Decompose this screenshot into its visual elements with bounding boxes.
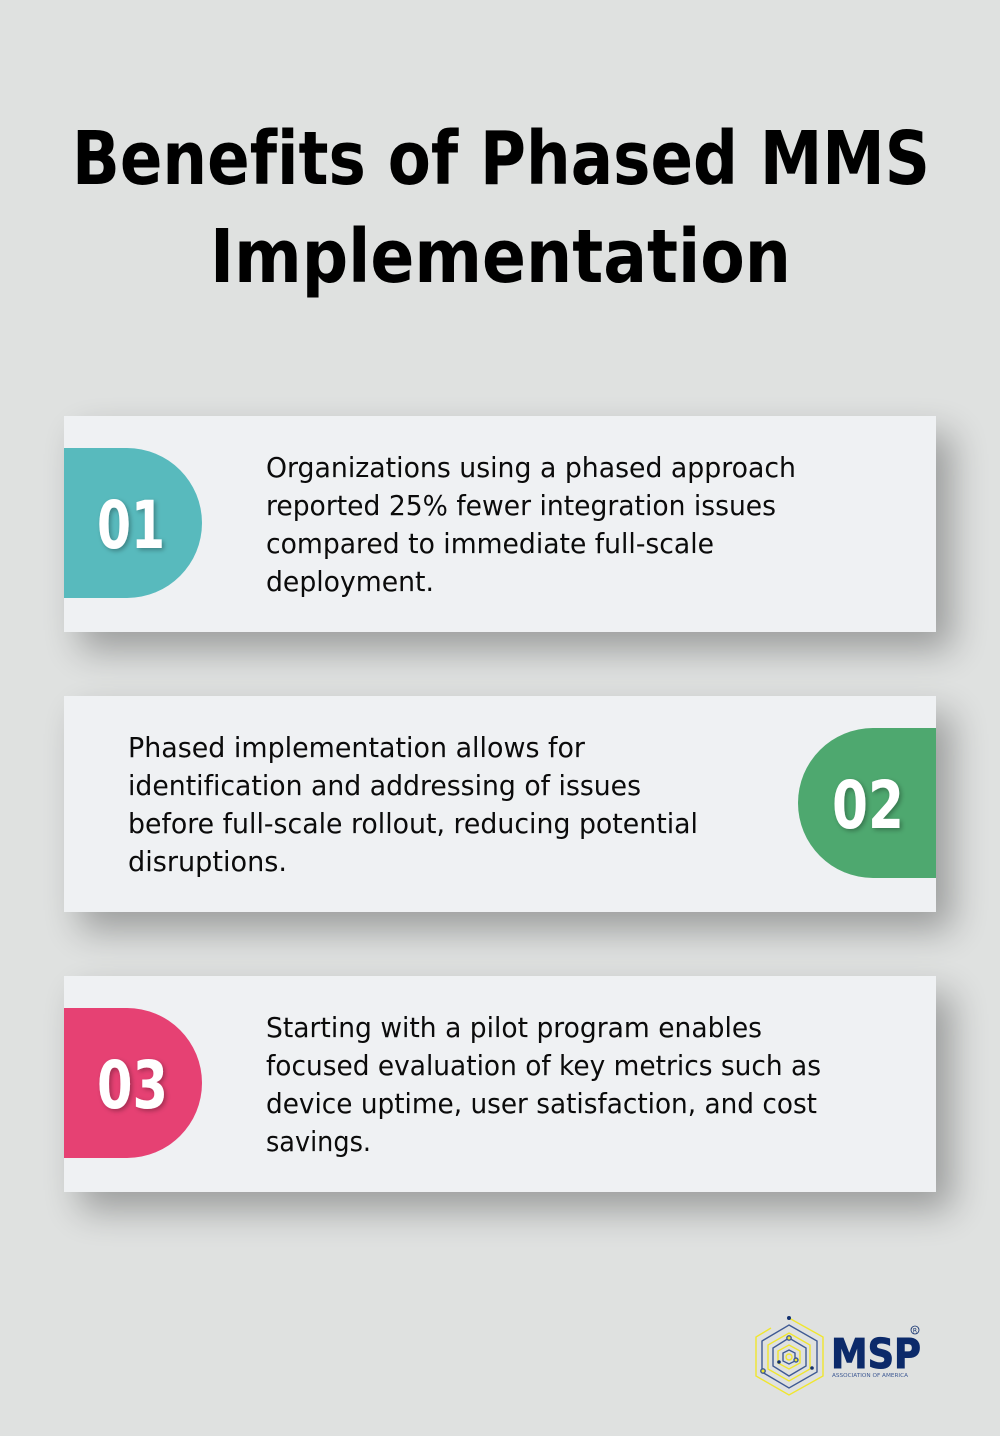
logo: MSP Association of America [756, 1316, 921, 1395]
panel: benefit 01 [64, 416, 952, 650]
text: benefit 02: identification and addressing of issues [128, 769, 641, 802]
text: benefit 01: deployment. [266, 565, 434, 598]
text: benefit 03: Starting with a pilot program enables [266, 1011, 762, 1044]
text: benefit 03: focused evaluation of key metrics such as [266, 1049, 821, 1082]
text: benefit 03: savings. [266, 1125, 371, 1158]
badge: 02 [798, 728, 936, 878]
icon: hexagon circuit [756, 1316, 823, 1395]
text: benefit 01: Organizations using a phased approach [266, 451, 796, 484]
text: benefit 02 [128, 731, 698, 878]
registered mark [911, 1326, 919, 1334]
wordmark: MSP: MSP [831, 1330, 921, 1378]
text: benefit 03: device uptime, user satisfaction, and cost [266, 1087, 817, 1120]
title: Implementation [210, 214, 791, 300]
text: benefit 01 [266, 451, 796, 598]
text: benefit 02: disruptions. [128, 845, 287, 878]
badge: 01: 01 [97, 487, 165, 564]
text: benefit 01: compared to immediate full-scale [266, 527, 714, 560]
badge: 02: 02 [832, 767, 904, 844]
registered mark: R [913, 1328, 917, 1334]
text: benefit 02: Phased implementation allows for [128, 731, 585, 764]
panel: benefit 02 [64, 696, 952, 930]
text: benefit 01: reported 25% fewer integration issues [266, 489, 776, 522]
badge: 01 [64, 448, 202, 598]
title [72, 116, 930, 300]
wordmark: tagline: ASSOCIATION OF AMERICA [832, 1373, 908, 1379]
text: benefit 03 [266, 1011, 821, 1158]
text: benefit 02: before full-scale rollout, reducing potential [128, 807, 698, 840]
badge: 03: 03 [97, 1047, 168, 1124]
panel: benefit 03 [64, 976, 952, 1210]
badge: 03 [64, 1008, 202, 1158]
